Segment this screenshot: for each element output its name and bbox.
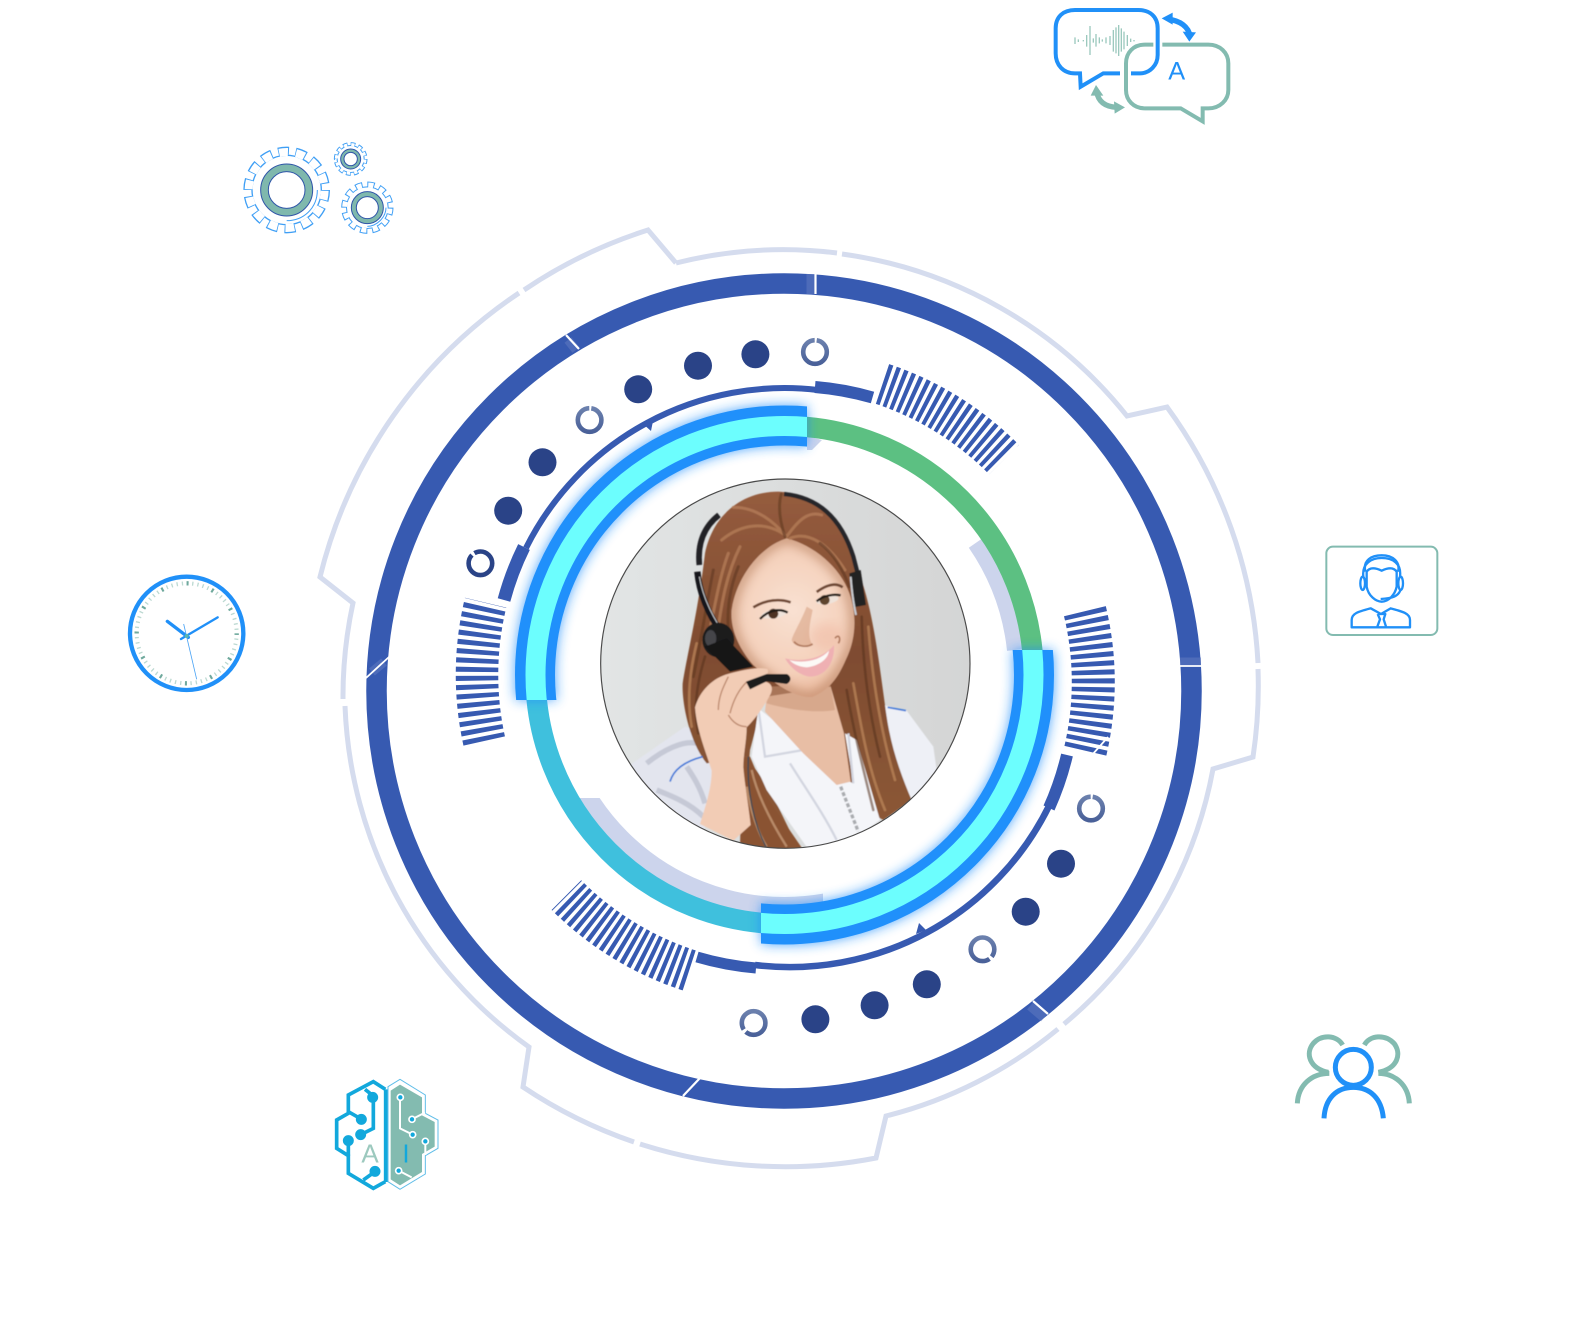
- blue lead person: [1324, 1049, 1383, 1118]
- waveform: [1075, 25, 1134, 56]
- dots ring: lower right: [742, 797, 1103, 1035]
- green arc: [807, 416, 1042, 650]
- letter A: A: [1168, 57, 1185, 85]
- shirt center: [752, 708, 880, 852]
- hatched tick bars: top right: [882, 384, 1004, 460]
- wire and shirt trim: [748, 757, 767, 848]
- hatched tick bars: right: [1085, 611, 1108, 755]
- right brain half: [388, 1079, 438, 1189]
- mouth: [785, 645, 834, 677]
- dots ring: upper left: [469, 340, 827, 575]
- shirt right shoulder: [877, 705, 937, 807]
- neck: [765, 687, 851, 785]
- hair top streaks: [689, 494, 895, 810]
- icon: three gears: [247, 144, 391, 231]
- eyes: [762, 612, 786, 618]
- bright arc: lower right: [761, 650, 1054, 944]
- small gear: [335, 144, 366, 174]
- headset stem: [694, 570, 719, 625]
- bright arc: upper left: [515, 406, 807, 700]
- hatched tick bars: left: [477, 603, 486, 741]
- hand: [695, 668, 772, 841]
- portrait: agent with headset: [601, 479, 970, 852]
- blue speech bubble: [1056, 10, 1158, 87]
- icon: clock: [130, 577, 243, 690]
- icon: people group: [1297, 1037, 1409, 1118]
- glow behind bright arcs: [535, 426, 1034, 924]
- teal swap arrow: [1091, 85, 1125, 114]
- icon: AI brain: [337, 1079, 438, 1189]
- large gear: [247, 151, 326, 229]
- teal speech bubble: [1126, 45, 1228, 121]
- infographic canvas: [128, 8, 1438, 1190]
- teal lower arc: [526, 700, 761, 934]
- eyebrows: [753, 585, 843, 607]
- letter I: I: [402, 1139, 410, 1169]
- hair strands over shirt: [740, 757, 803, 850]
- blue swap arrow: [1162, 13, 1196, 42]
- shirt left shoulder: [632, 727, 712, 828]
- hair long strands: [689, 627, 895, 810]
- icon: agent card: [1326, 547, 1437, 635]
- face shading: [731, 538, 854, 697]
- medium gear: [344, 184, 391, 231]
- thick blue outer ring: [366, 274, 1202, 1098]
- teal team members: [1297, 1037, 1409, 1103]
- thin inner blue ring with thick segments: [504, 387, 1067, 968]
- ear cups and mic: [702, 623, 734, 657]
- letter A: A: [361, 1139, 379, 1169]
- left brain half: [337, 1082, 386, 1188]
- icon: speech translation bubbles: [1056, 10, 1228, 121]
- nostril and chin lines: [794, 636, 840, 646]
- hair back: [683, 492, 912, 852]
- hatched tick bars: bottom: [566, 895, 689, 970]
- lavender inner arcs: [554, 436, 1016, 906]
- face: [731, 538, 854, 697]
- outer lavender circuit outline: [320, 230, 1258, 1167]
- headset band: [699, 515, 719, 565]
